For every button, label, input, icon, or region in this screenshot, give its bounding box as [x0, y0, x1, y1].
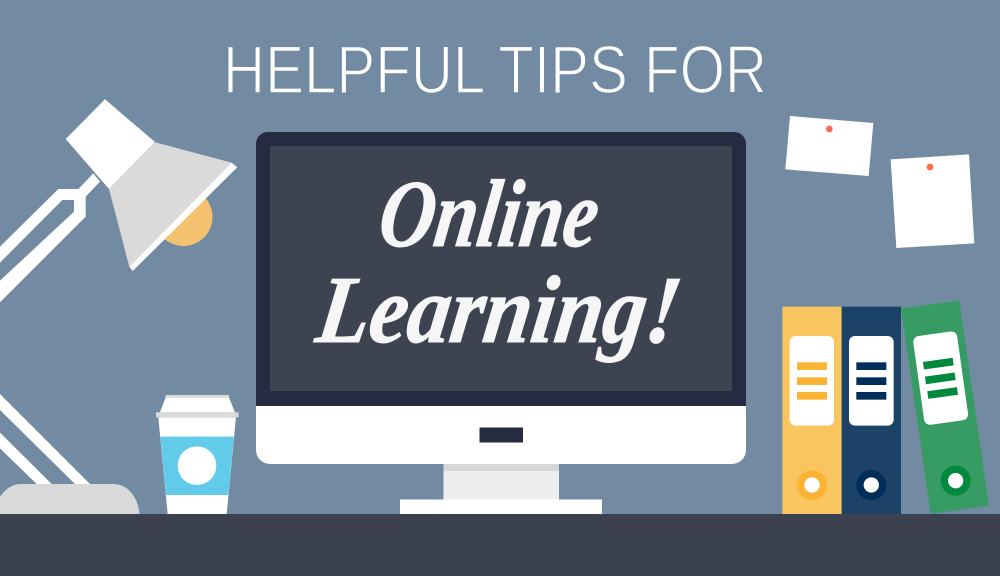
- monitor base: [400, 500, 602, 514]
- monitor screen: [270, 146, 732, 391]
- binders: [782, 301, 989, 514]
- title: helpful tips for: HELPFUL TIPS FOR: [223, 32, 767, 108]
- lamp bulb: [154, 188, 212, 246]
- note left: [785, 116, 873, 176]
- icon: coffee cup: [156, 395, 239, 514]
- lamp neck: [66, 99, 155, 189]
- sticky notes: [785, 116, 974, 248]
- binder green: [901, 301, 989, 514]
- monitor stand: [444, 463, 559, 500]
- lamp base: [0, 484, 140, 514]
- monitor frame: [256, 132, 746, 406]
- lamp lower arm: [0, 394, 90, 484]
- lamp upper arm: [0, 173, 100, 302]
- monitor button: [480, 428, 523, 442]
- binder navy: [842, 307, 901, 514]
- monitor: [256, 132, 746, 514]
- binder yellow: [782, 307, 842, 514]
- cup lid: [160, 397, 235, 412]
- heading: online learning: Learning!: [310, 256, 688, 363]
- heading: online learning: [310, 160, 688, 363]
- cup band: [160, 437, 234, 495]
- note right: [891, 154, 974, 248]
- cup circle: [178, 446, 216, 485]
- desk: [0, 514, 1000, 576]
- cup body: [158, 417, 236, 514]
- icon: desk lamp: [0, 99, 237, 514]
- heading: online learning: Online: [373, 160, 606, 267]
- monitor chin: [256, 400, 746, 464]
- lamp shade rim: [129, 163, 237, 271]
- lamp shade: [109, 142, 232, 267]
